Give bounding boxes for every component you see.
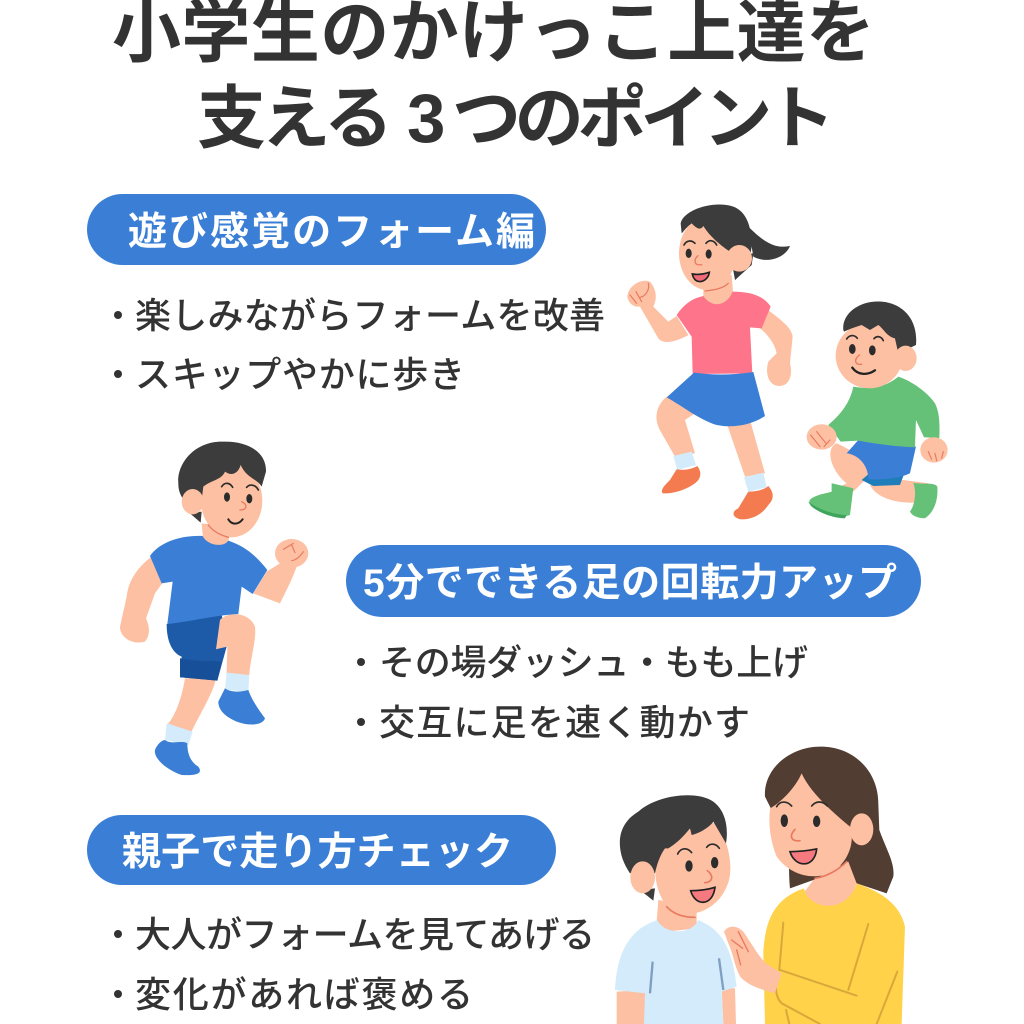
title: 3 <box>407 80 445 157</box>
section 1 heading pill: 遊び感覚のフォーム編 <box>128 211 535 254</box>
title: つのポイント <box>452 80 835 157</box>
illustration: parent and child talking <box>615 747 905 1024</box>
mother <box>763 747 905 1024</box>
boy in green <box>807 302 948 518</box>
section 1 heading pill <box>87 194 546 265</box>
title <box>112 0 875 157</box>
section 2 heading pill: 5分でできる足の回転力アップ <box>363 562 897 605</box>
section 3 heading pill <box>87 815 556 885</box>
section 1 bullets: スキップやかに歩き <box>135 354 465 395</box>
section 2 bullets: 交互に足を速く動かす <box>379 702 750 743</box>
title: 支える <box>197 80 393 157</box>
child in light blue <box>615 795 737 1024</box>
section 2 bullets <box>357 642 808 743</box>
section 3 bullets <box>114 914 595 1015</box>
illustration: boy running in blue <box>120 442 308 775</box>
section 3 heading pill: 親子で走り方チェック <box>122 831 513 874</box>
illustration: girl and boy running <box>627 205 948 519</box>
girl <box>627 205 793 519</box>
section 1 bullets <box>114 295 605 395</box>
section 3 bullets: 変化があれば褒める <box>135 974 473 1015</box>
section 3 bullets: 大人がフォームを見てあげる <box>135 914 595 955</box>
mother's hand <box>724 927 782 993</box>
section 2 heading pill <box>346 545 921 617</box>
section 1 bullets: 楽しみながらフォームを改善 <box>135 295 605 336</box>
section 2 bullets: その場ダッシュ・もも上げ <box>379 642 808 683</box>
